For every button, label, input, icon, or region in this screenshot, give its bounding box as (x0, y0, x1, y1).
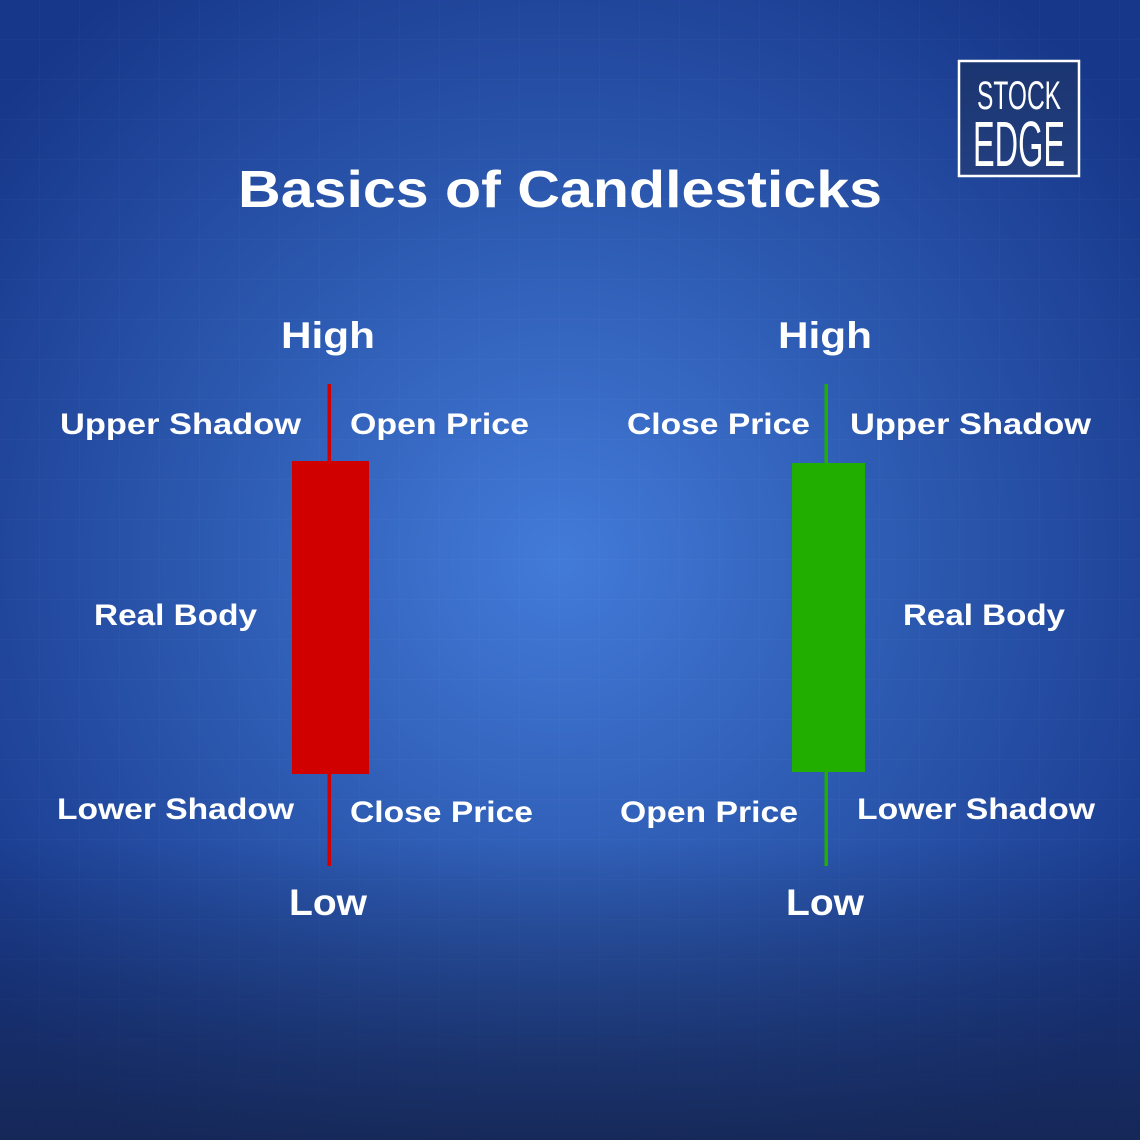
candlestick: bullish (green) (792, 384, 865, 866)
labels: green candle: Upper Shadow (850, 408, 1092, 441)
candlestick: bearish (red) (292, 384, 369, 866)
labels: red candle: Close Price (350, 796, 533, 829)
labels: red candle: High (281, 315, 375, 356)
title: Basics of Candlesticks (238, 161, 882, 219)
labels: green candle: Low (786, 882, 864, 923)
labels: red candle: Upper Shadow (60, 408, 302, 441)
labels: red candle: Low (289, 882, 367, 923)
labels: green candle: Real Body (903, 599, 1065, 632)
labels: green candle: Close Price (627, 408, 810, 441)
logo: StockEdge (959, 61, 1079, 180)
labels: red candle (57, 315, 533, 923)
logo: StockEdge: STOCK (977, 74, 1061, 118)
labels: red candle: Lower Shadow (57, 793, 295, 826)
labels: green candle: Lower Shadow (857, 793, 1096, 826)
labels: red candle: Open Price (350, 408, 529, 441)
labels: green candle (620, 315, 1096, 923)
labels: green candle: High (778, 315, 872, 356)
labels: red candle: Real Body (94, 599, 257, 632)
labels: green candle: Open Price (620, 796, 798, 829)
